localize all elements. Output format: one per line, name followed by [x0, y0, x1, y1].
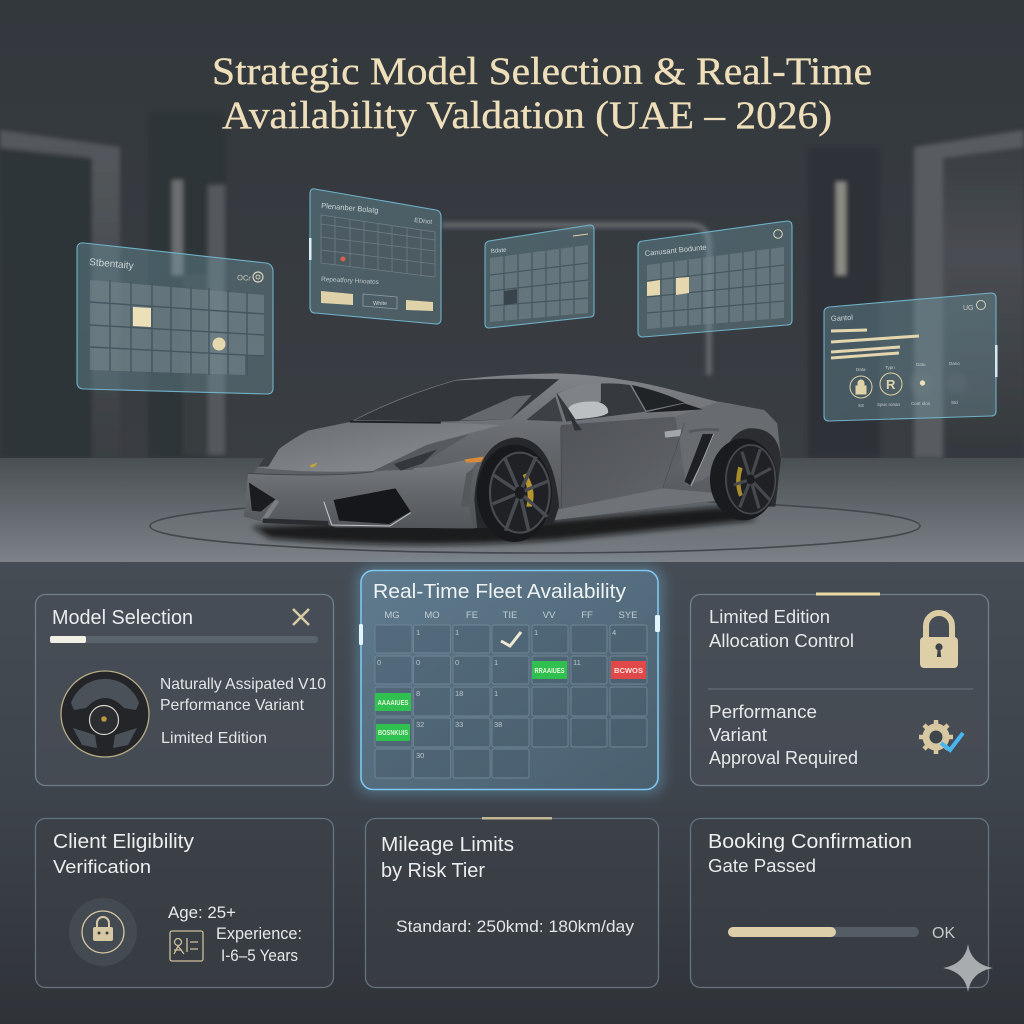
- date numbers: 32: [416, 720, 424, 729]
- floating panel: planner: Plenanber Bolatg: [321, 201, 379, 215]
- panel: client eligibility: [36, 818, 334, 988]
- mileage values: Standard: 250kmd: 180km/day: [396, 917, 635, 936]
- approval text: [709, 701, 858, 768]
- car: [244, 373, 781, 545]
- weekday labels: MO: [424, 610, 440, 621]
- lower dashboard background: [0, 562, 1024, 1024]
- experience requirement: I-6–5 Years: [221, 946, 298, 965]
- date numbers: 8: [416, 689, 420, 698]
- model details: [160, 676, 326, 747]
- status: booked: [611, 661, 646, 679]
- approval text: Performance: [709, 701, 817, 722]
- date numbers: 1: [416, 628, 420, 637]
- panel: real-time fleet availability: [356, 566, 664, 795]
- heading: [53, 831, 194, 877]
- date numbers: 4: [612, 628, 616, 637]
- floating panel: controls: Gantol: [831, 313, 854, 323]
- panel: mileage limits: [366, 817, 658, 988]
- title: Availability Valdation (UAE – 2026): [222, 94, 832, 137]
- panel: allocation and approval: [690, 592, 988, 786]
- windows: [355, 379, 703, 422]
- icon: licence card: [170, 931, 203, 961]
- turntable platform: [150, 499, 920, 553]
- rear wheel: [710, 428, 781, 520]
- date numbers: 1: [494, 689, 498, 698]
- model details: Naturally Assipated V10: [160, 676, 326, 693]
- weekday labels: TIE: [503, 610, 517, 621]
- status: available: [375, 693, 411, 711]
- allocation text: Allocation Control: [709, 630, 854, 651]
- floating panel: controls: Data: [856, 367, 866, 372]
- approval text: Variant: [709, 724, 767, 745]
- mirror: [568, 402, 608, 431]
- allocation text: Limited Edition: [709, 606, 830, 627]
- progress bar: [50, 636, 318, 643]
- headlights and details: [258, 423, 719, 508]
- heading: Mileage Limits: [381, 834, 514, 856]
- icon: padlock: [920, 613, 958, 668]
- floating panel: planner: White: [373, 301, 387, 307]
- weekday labels: VV: [543, 610, 556, 621]
- floating panel: planner: [309, 189, 441, 324]
- floating panel: calendar right: [638, 221, 792, 337]
- weekday labels: FF: [581, 610, 593, 621]
- experience requirement: Experience:: [216, 924, 302, 943]
- floating panel: controls: UG: [963, 305, 974, 312]
- experience requirement: [216, 924, 302, 965]
- heading: Verification: [53, 856, 151, 877]
- floating panel: controls: Cont idos: [911, 401, 931, 406]
- status label: OK: [932, 925, 955, 942]
- floating panel: small calendar: [485, 225, 594, 328]
- floating panel: controls: SS: [858, 403, 864, 408]
- heading: Client Eligibility: [53, 831, 194, 853]
- status: available: RRAAIUES: [534, 668, 565, 675]
- date numbers: 0: [416, 658, 420, 667]
- status: available: BOSNKUIS: [378, 730, 408, 737]
- front wheel: [474, 437, 559, 542]
- status: available: [532, 661, 567, 679]
- icon: check mark: [501, 632, 521, 646]
- progress bar: [728, 927, 919, 937]
- front intakes: [248, 463, 411, 526]
- floating panel: controls: Std: [951, 400, 958, 405]
- title: [212, 50, 872, 137]
- status: available: [376, 724, 410, 741]
- date numbers: 38: [494, 720, 502, 729]
- calendar grid: [375, 625, 647, 778]
- date numbers: 1: [455, 628, 459, 637]
- floating panel: planner: Repeatfory Hnoatos: [321, 276, 380, 286]
- date numbers: 11: [573, 658, 581, 667]
- floating panel: calendar left: [77, 243, 273, 394]
- status: booked: BCWOS: [614, 668, 643, 675]
- weekday labels: SYE: [618, 610, 638, 621]
- age requirement: Age: 25+: [168, 904, 236, 922]
- heading: Booking Confirmation: [708, 831, 912, 853]
- icon: steering wheel: [61, 671, 149, 757]
- heading: Model Selection: [52, 607, 193, 629]
- panel: booking confirmation: Gate Passed: [708, 856, 816, 876]
- floating panel: controls: Spuc ronan: [877, 402, 901, 407]
- floating panel: controls: Typn: [885, 365, 895, 370]
- weekday labels: MG: [384, 610, 400, 621]
- status: available: AAAAIUES: [378, 700, 409, 707]
- panel: model selection: [36, 594, 334, 786]
- model details: Limited Edition: [161, 730, 267, 747]
- icon: sparkle: [943, 944, 993, 992]
- icon: gear with check: [919, 720, 963, 754]
- floating panel: calendar left: Stbentaity: [89, 257, 134, 272]
- allocation text: [709, 606, 854, 651]
- floating panel: small calendar: Bdate: [491, 248, 507, 255]
- title: Strategic Model Selection & Real-Time: [212, 50, 872, 93]
- heading: by Risk Tier: [381, 860, 485, 882]
- weekday labels: [384, 610, 638, 621]
- heading: Real-Time Fleet Availability: [373, 580, 627, 603]
- weekday labels: FE: [466, 610, 478, 621]
- floating panel: controls: Dano: [949, 361, 960, 366]
- floating panel: controls: R: [886, 377, 896, 392]
- date numbers: 1: [494, 658, 498, 667]
- date numbers: 33: [455, 720, 463, 729]
- icon: lock badge: [69, 898, 137, 966]
- approval text: Approval Required: [709, 747, 858, 768]
- icon: close: [293, 609, 309, 625]
- date numbers: 18: [455, 689, 463, 698]
- floating panel: calendar left: OCr: [237, 273, 252, 283]
- car shadow: [252, 507, 757, 545]
- panel: booking confirmation: [690, 818, 988, 988]
- date numbers: 30: [416, 751, 424, 760]
- floating panel: calendar right: Canusant Bodunte: [644, 243, 707, 258]
- date numbers: 0: [455, 658, 459, 667]
- floating panel: planner: EDnot: [414, 217, 433, 226]
- floating panel: controls: [824, 293, 998, 421]
- date numbers: 0: [377, 658, 381, 667]
- showroom background: [0, 0, 1024, 562]
- heading: [381, 834, 514, 882]
- date numbers: 1: [534, 628, 538, 637]
- model details: Performance Variant: [160, 697, 305, 714]
- car body: [244, 373, 781, 528]
- date numbers: [377, 628, 616, 760]
- floating panel: controls: Datu: [916, 362, 926, 367]
